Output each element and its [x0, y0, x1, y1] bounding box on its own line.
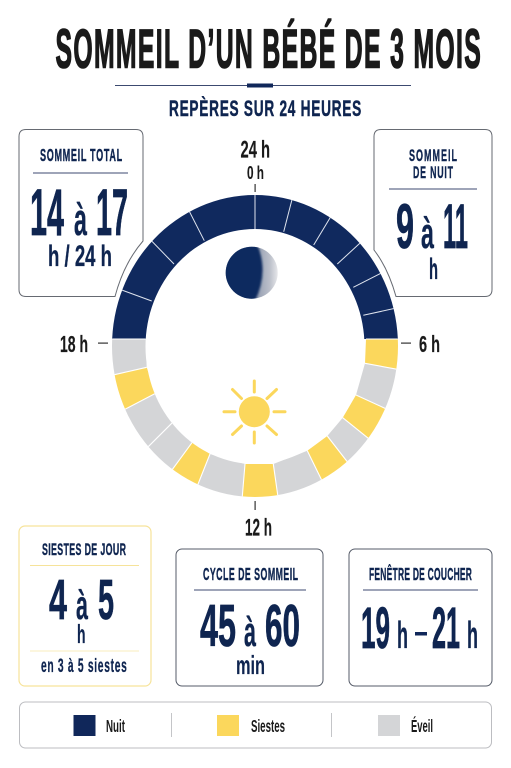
- label: 18 h: 18 h: [60, 331, 88, 357]
- panel: fenêtre de coucher: h: [467, 615, 478, 657]
- label: 0 h: 0 h: [247, 163, 264, 183]
- panel: cycle de sommeil: 60: [265, 593, 300, 659]
- legend item: nuit: Nuit: [106, 716, 125, 736]
- legend: [20, 702, 492, 748]
- panel: fenêtre de coucher: FENÊTRE DE COUCHER: [369, 562, 472, 584]
- panel: cycle de sommeil: 45: [200, 593, 236, 659]
- panel: cycle de sommeil: min: [236, 650, 265, 680]
- panel: cycle de sommeil: à: [244, 608, 256, 655]
- panel: sommeil de nuit: h: [429, 253, 438, 286]
- label: 24 h: 24 h: [240, 136, 270, 164]
- tick: top: [254, 184, 256, 192]
- panel: sommeil total: h / 24 h: [48, 240, 112, 273]
- panel: fenêtre de coucher: [349, 549, 492, 686]
- panel: siestes de jour: à: [76, 582, 88, 628]
- panel: cycle de sommeil: CYCLE DE SOMMEIL: [203, 565, 298, 585]
- tick: bottom: [254, 501, 256, 510]
- title: SOMMEIL D’UN BÉBÉ DE 3 MOIS: [56, 18, 481, 80]
- panel: sommeil de nuit: 9: [396, 192, 414, 262]
- legend item: éveil: Éveil: [411, 715, 433, 736]
- panel: siestes de jour: en 3 à 5 siestes: [41, 656, 127, 677]
- ring segments: [112, 195, 398, 497]
- panel: sommeil de nuit: DE NUIT: [413, 163, 454, 182]
- panel: siestes de jour: 5: [98, 568, 114, 632]
- tick: right: [401, 342, 411, 344]
- panel: sommeil de nuit: [374, 130, 492, 296]
- legend item: éveil: [378, 715, 433, 736]
- panel: fenêtre de coucher: 19: [361, 596, 390, 661]
- icon: sun: [224, 381, 285, 443]
- panel: sommeil de nuit: 11: [443, 192, 468, 262]
- panel: siestes de jour: h: [77, 619, 86, 649]
- panel: sommeil total: SOMMEIL TOTAL: [40, 145, 122, 165]
- icon: moon: [226, 246, 278, 299]
- subtitle: REPÈRES SUR 24 HEURES: [169, 96, 361, 121]
- legend item: siestes: [217, 715, 285, 736]
- panel: sommeil total: 17: [96, 175, 128, 249]
- panel: fenêtre de coucher: 21: [432, 596, 460, 661]
- panel: siestes de jour: SIESTES DE JOUR: [42, 540, 126, 559]
- panel: siestes de jour: 4: [49, 568, 67, 632]
- title divider: [115, 84, 411, 88]
- tick: left: [98, 342, 108, 344]
- legend item: nuit: [74, 715, 125, 736]
- panel: cycle de sommeil: [176, 549, 323, 686]
- label: 6 h: 6 h: [419, 331, 440, 357]
- panel: siestes de jour: [19, 526, 151, 686]
- label: 12 h: 12 h: [245, 514, 272, 542]
- panel: sommeil total: [19, 130, 143, 296]
- panel: fenêtre de coucher: h: [397, 615, 408, 657]
- panel: sommeil de nuit: SOMMEIL: [409, 146, 457, 165]
- panel: sommeil de nuit: à: [421, 209, 434, 258]
- panel: sommeil total: à: [74, 194, 88, 245]
- chart: 24 hour ring: [112, 195, 398, 497]
- panel: sommeil total: 14: [30, 175, 64, 249]
- legend item: siestes: Siestes: [251, 716, 285, 736]
